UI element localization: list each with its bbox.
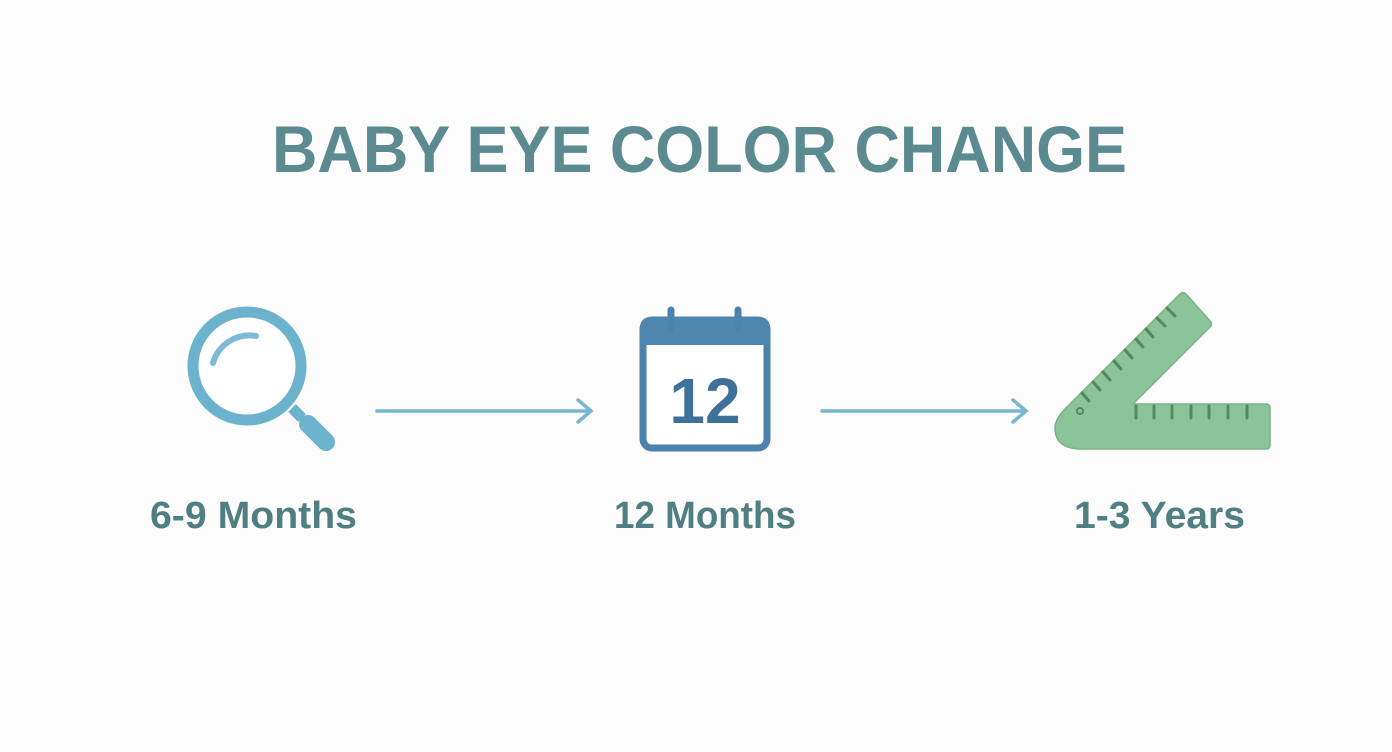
title: BABY EYE COLOR CHANGE [272, 112, 1127, 186]
icon: calendar 12 [640, 310, 770, 448]
icon: calendar 12: 12 [669, 365, 741, 437]
label: 12 Months: 12 Months [614, 495, 796, 537]
arrow 1 [377, 400, 591, 422]
label: 6-9 Months: 6-9 Months [150, 495, 357, 537]
label: 1-3 Years: 1-3 Years [1074, 495, 1245, 537]
arrow 2 [822, 400, 1026, 422]
icon: folding ruler [1055, 292, 1270, 449]
icon: magnifying glass [193, 312, 326, 442]
